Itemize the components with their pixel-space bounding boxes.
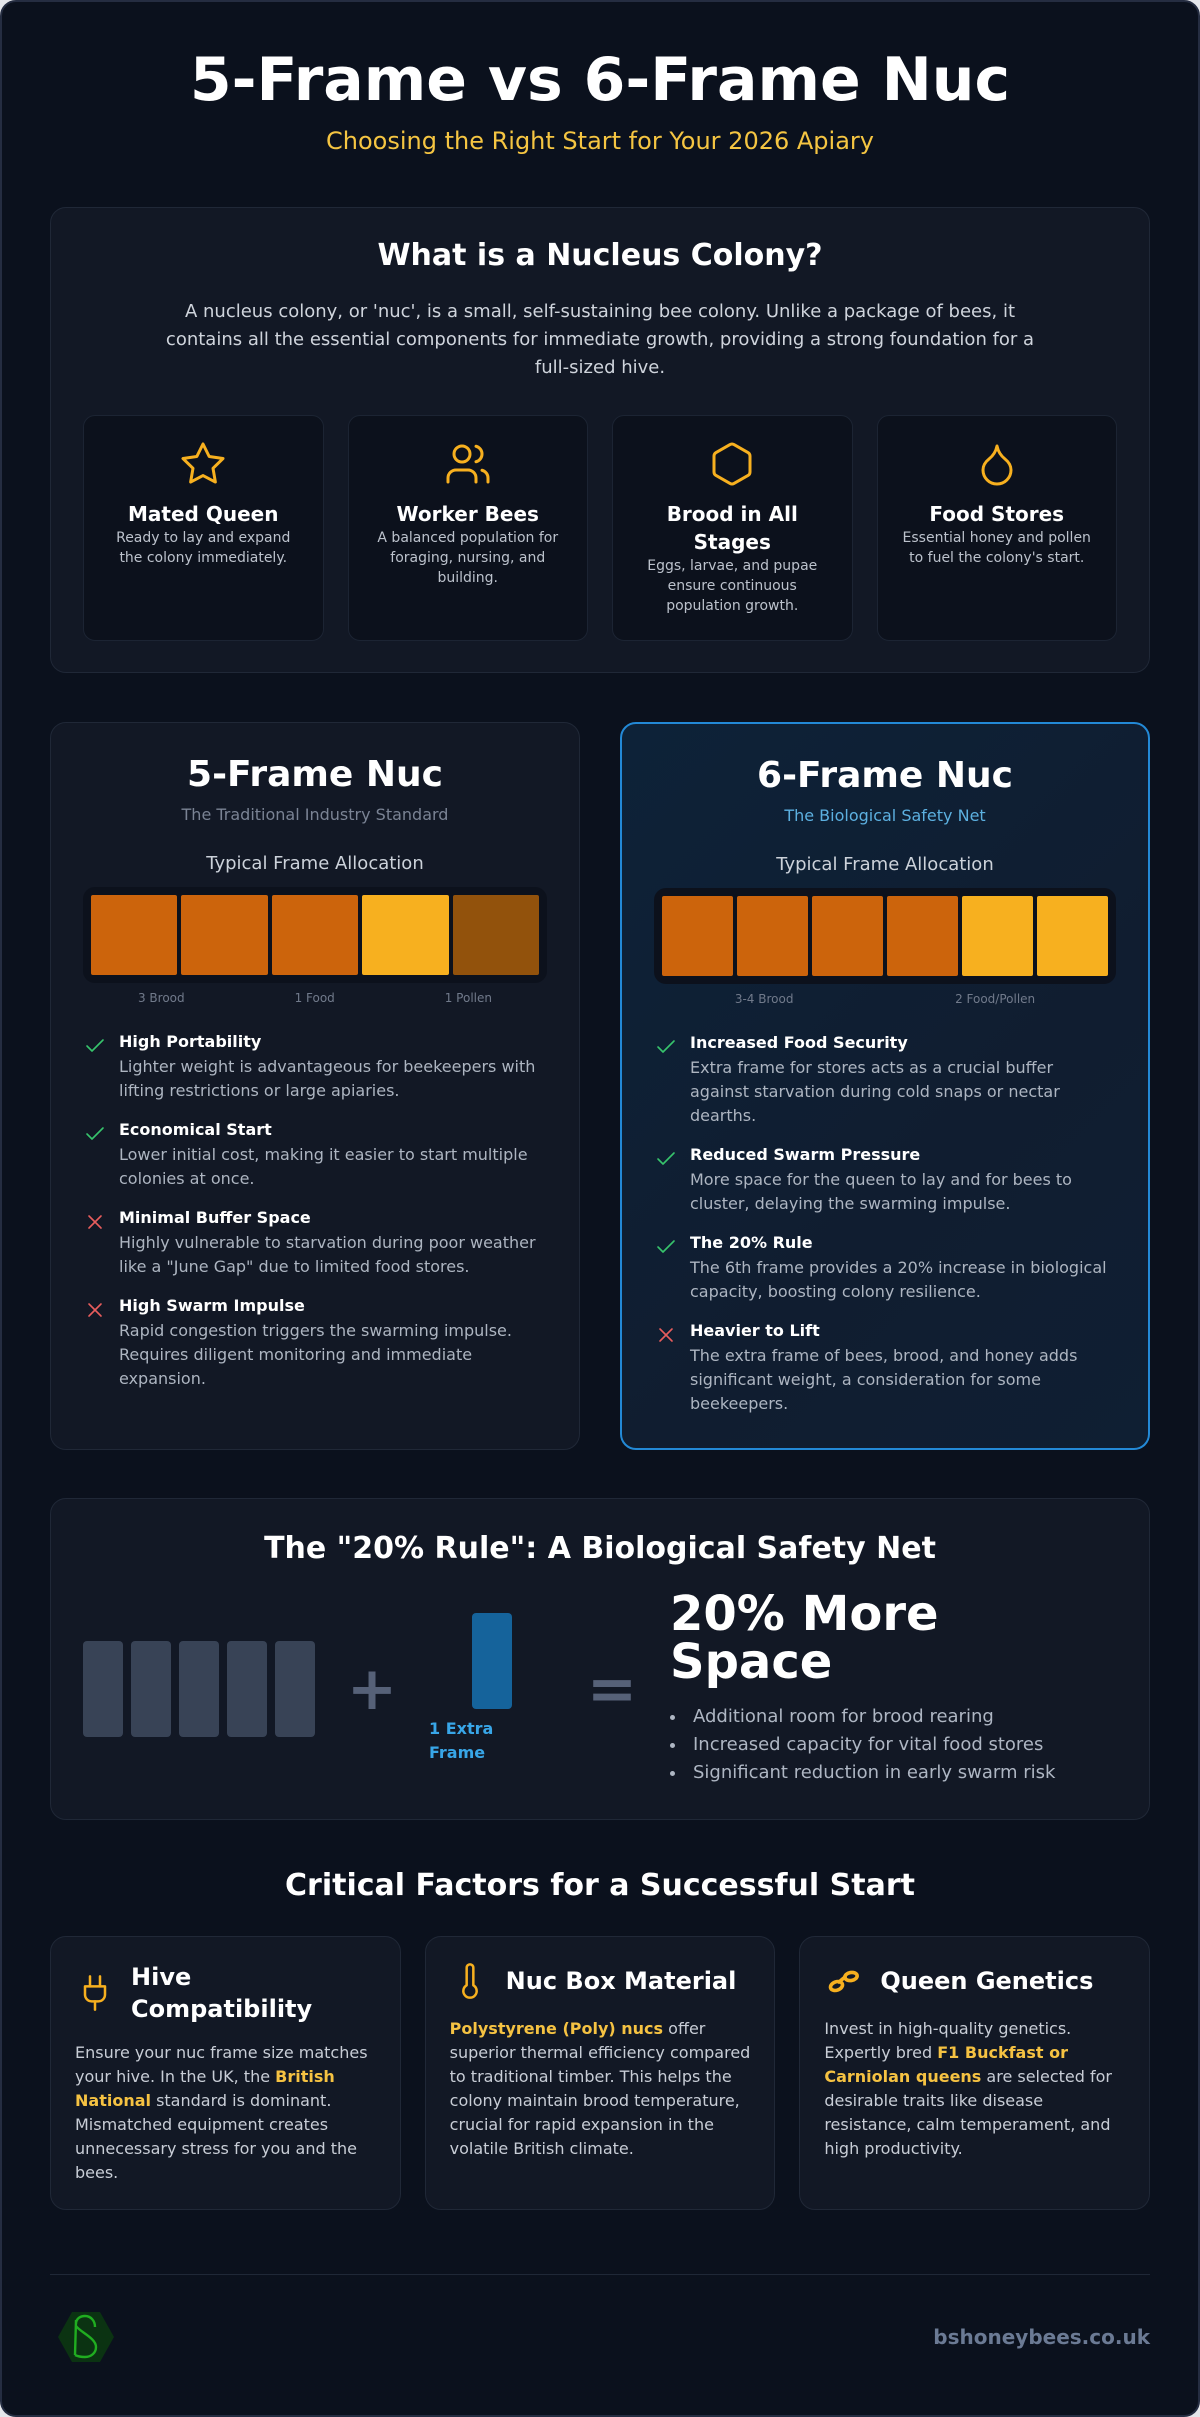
pro: economical start: Economical Start	[119, 1120, 272, 1139]
pro: high portability: lifting restrictions or large apiaries.	[119, 1081, 400, 1100]
heading: 5-frame nuc: 5-Frame Nuc	[187, 754, 443, 795]
con: high swarm impulse	[88, 1296, 512, 1388]
pro: the 20% rule	[657, 1233, 1107, 1301]
result heading	[670, 1586, 939, 1690]
con: high swarm impulse: High Swarm Impulse	[119, 1296, 305, 1315]
body text: to traditional timber. This helps the	[450, 2067, 732, 2086]
icon: linked genetics	[828, 1970, 859, 1992]
body text: volatile British climate.	[450, 2139, 634, 2158]
card: worker bees: A balanced population for	[377, 530, 558, 546]
panel: 20% rule	[50, 1498, 1150, 1820]
intro text	[166, 301, 1034, 378]
frame allocation legend	[735, 992, 1035, 1006]
heading: critical factors: Critical Factors for a Successful Start	[285, 1868, 915, 1903]
pro: increased food security: against starvation during cold snaps or nectar	[690, 1082, 1060, 1101]
frame allocation legend: 1 Food	[295, 991, 335, 1005]
body text: crucial for rapid expansion in the	[450, 2115, 714, 2134]
body text: colony maintain brood temperature,	[450, 2091, 740, 2110]
pro: increased food security: dearths.	[690, 1106, 756, 1125]
pro: reduced swarm pressure: cluster, delaying the swarming impulse.	[690, 1194, 1010, 1213]
panel: queen genetics	[799, 1936, 1150, 2210]
card: food stores: Food Stores	[929, 502, 1064, 526]
pro: increased food security: Increased Food Security	[690, 1033, 908, 1052]
card: food stores	[876, 415, 1117, 641]
body text: Polystyrene (Poly) nucs offer	[450, 2019, 705, 2038]
diagram: five frames	[83, 1641, 315, 1737]
subheading: The Traditional Industry Standard	[182, 805, 448, 824]
logo	[58, 2312, 114, 2362]
con: high swarm impulse: Requires diligent monitoring and immediate	[119, 1345, 472, 1364]
card: worker bees: Worker Bees	[397, 502, 539, 526]
card: mated queen: Ready to lay and expand	[116, 530, 290, 546]
frame allocation label: Typical Frame Allocation	[206, 853, 424, 874]
icon: star	[181, 442, 224, 484]
icon: users	[446, 444, 490, 484]
website: bshoneybees.co.uk	[933, 2325, 1150, 2349]
heading: 20% rule: The "20% Rule": A Biological Safety Net	[264, 1531, 936, 1566]
body text	[450, 2019, 750, 2158]
card: brood in all stages: Stages	[694, 530, 771, 554]
frame allocation legend: 3-4 Brood	[735, 992, 793, 1006]
icon: hexagon	[712, 442, 752, 486]
body text: Invest in high-quality genetics.	[824, 2019, 1071, 2038]
panel: what is a nucleus colony	[50, 207, 1150, 673]
con: minimal buffer space: Highly vulnerable to starvation during poor weather	[119, 1233, 536, 1252]
card: food stores: Essential honey and pollen	[903, 530, 1091, 546]
con: high swarm impulse: expansion.	[119, 1369, 206, 1388]
result heading: Space	[670, 1634, 832, 1690]
con: heavier to lift: beekeepers.	[690, 1394, 788, 1413]
body text: National standard is dominant.	[75, 2091, 331, 2110]
icon: droplet	[982, 444, 1012, 486]
intro text: A nucleus colony, or 'nuc', is a small, self-sustaining bee colony. Unlike a package of bees, it	[185, 301, 1015, 322]
pro: increased food security: Extra frame for stores acts as a crucial buffer	[690, 1058, 1053, 1077]
card: worker bees	[348, 415, 588, 641]
plus sign: +	[347, 1654, 397, 1724]
footer	[50, 2274, 1150, 2374]
diagram: one extra frame: Frame	[429, 1743, 485, 1762]
intro text: contains all the essential components for immediate growth, providing a strong foundation for a	[166, 329, 1034, 350]
panel: 6-frame nuc	[620, 722, 1150, 1450]
component cards	[83, 415, 1117, 641]
con: minimal buffer space	[88, 1208, 536, 1276]
card: worker bees: building.	[437, 570, 498, 586]
frame allocation legend	[138, 991, 492, 1005]
con: heavier to lift: The extra frame of bees, brood, and honey adds	[690, 1346, 1077, 1365]
pro: the 20% rule: The 6th frame provides a 20% increase in biological	[690, 1258, 1107, 1277]
diagram: one extra frame	[429, 1613, 512, 1762]
card: brood in all stages: population growth.	[666, 598, 798, 614]
frame allocation label: Typical Frame Allocation	[776, 854, 994, 875]
pro: high portability: High Portability	[119, 1032, 261, 1051]
frame allocation legend: 2 Food/Pollen	[955, 992, 1035, 1006]
heading: 6-frame nuc: 6-Frame Nuc	[757, 755, 1013, 796]
card: brood in all stages: ensure continuous	[668, 578, 797, 594]
pro: reduced swarm pressure	[657, 1145, 1072, 1213]
pro: increased food security	[657, 1033, 1060, 1125]
card: worker bees: foraging, nursing, and	[390, 550, 545, 566]
card: brood in all stages: Brood in All	[667, 502, 798, 526]
result benefits list	[670, 1706, 1056, 1783]
pro: high portability	[86, 1032, 535, 1100]
card: mated queen: the colony immediately.	[119, 550, 287, 566]
result benefits list: Increased capacity for vital food stores	[693, 1734, 1043, 1755]
chart: frame allocation bar	[654, 888, 1116, 984]
subtitle: Choosing the Right Start for Your 2026 Apiary	[326, 127, 874, 155]
card: mated queen	[83, 415, 324, 641]
intro text: full-sized hive.	[535, 357, 665, 378]
diagram: one extra frame: 1 Extra	[429, 1719, 493, 1738]
pro: the 20% rule: The 20% Rule	[690, 1233, 813, 1252]
card header	[84, 1963, 312, 2023]
result benefits list: Additional room for brood rearing	[693, 1706, 994, 1727]
icon: plug	[84, 1975, 106, 2011]
con: heavier to lift: Heavier to Lift	[690, 1321, 820, 1340]
card header: Nuc Box Material	[506, 1967, 736, 1995]
body text: Mismatched equipment creates	[75, 2115, 328, 2134]
con: high swarm impulse: Rapid congestion triggers the swarming impulse.	[119, 1321, 512, 1340]
body text: superior thermal efficiency compared	[450, 2043, 750, 2062]
pros and cons list	[86, 1032, 536, 1388]
frame allocation legend: 3 Brood	[138, 991, 185, 1005]
card header: Compatibility	[131, 1995, 312, 2023]
con: minimal buffer space: Minimal Buffer Space	[119, 1208, 311, 1227]
body text: Ensure your nuc frame size matches	[75, 2043, 368, 2062]
body text: unnecessary stress for you and the	[75, 2139, 357, 2158]
heading: what is a nucleus colony: What is a Nucleus Colony?	[377, 238, 823, 273]
card header: Hive	[131, 1963, 191, 1991]
subheading: The Biological Safety Net	[784, 806, 986, 825]
card: brood in all stages	[612, 415, 852, 641]
pro: reduced swarm pressure: Reduced Swarm Pressure	[690, 1145, 920, 1164]
card header	[462, 1963, 736, 1999]
equals sign: =	[587, 1654, 637, 1724]
card: brood in all stages: Eggs, larvae, and pupae	[647, 558, 817, 574]
panel: hive compatibility	[50, 1936, 401, 2210]
pros and cons list	[657, 1033, 1107, 1413]
icon: thermometer	[462, 1963, 478, 1999]
con: minimal buffer space: like a "June Gap" due to limited food stores.	[119, 1257, 470, 1276]
result heading: 20% More	[670, 1586, 939, 1642]
pro: economical start	[86, 1120, 528, 1188]
chart: frame allocation bar	[83, 887, 547, 983]
pro: economical start: Lower initial cost, making it easier to start multiple	[119, 1145, 528, 1164]
body text	[824, 2019, 1112, 2158]
card header: Queen Genetics	[880, 1967, 1093, 1995]
panel: 5-frame nuc	[50, 722, 580, 1450]
pro: the 20% rule: capacity, boosting colony resilience.	[690, 1282, 981, 1301]
card: food stores: to fuel the colony's start.	[909, 550, 1084, 566]
result benefits list: Significant reduction in early swarm risk	[693, 1762, 1055, 1783]
body text: high productivity.	[824, 2139, 963, 2158]
body text	[75, 2043, 368, 2182]
pro: economical start: colonies at once.	[119, 1169, 254, 1188]
pro: reduced swarm pressure: More space for the queen to lay and for bees to	[690, 1170, 1072, 1189]
body text: resistance, calm temperament, and	[824, 2115, 1110, 2134]
panel: nuc box material	[425, 1936, 775, 2210]
body text: your hive. In the UK, the British	[75, 2067, 335, 2086]
body text: Carniolan queens are selected for	[824, 2067, 1112, 2086]
frame allocation legend: 1 Pollen	[445, 991, 492, 1005]
body text: bees.	[75, 2163, 118, 2182]
title: 5-Frame vs 6-Frame Nuc	[190, 45, 1010, 115]
con: heavier to lift	[659, 1321, 1077, 1413]
con: heavier to lift: significant weight, a consideration for some	[690, 1370, 1041, 1389]
card: mated queen: Mated Queen	[128, 502, 278, 526]
body text: desirable traits like disease	[824, 2091, 1043, 2110]
pro: high portability: Lighter weight is advantageous for beekeepers with	[119, 1057, 535, 1076]
body text: Expertly bred F1 Buckfast or	[824, 2043, 1068, 2062]
